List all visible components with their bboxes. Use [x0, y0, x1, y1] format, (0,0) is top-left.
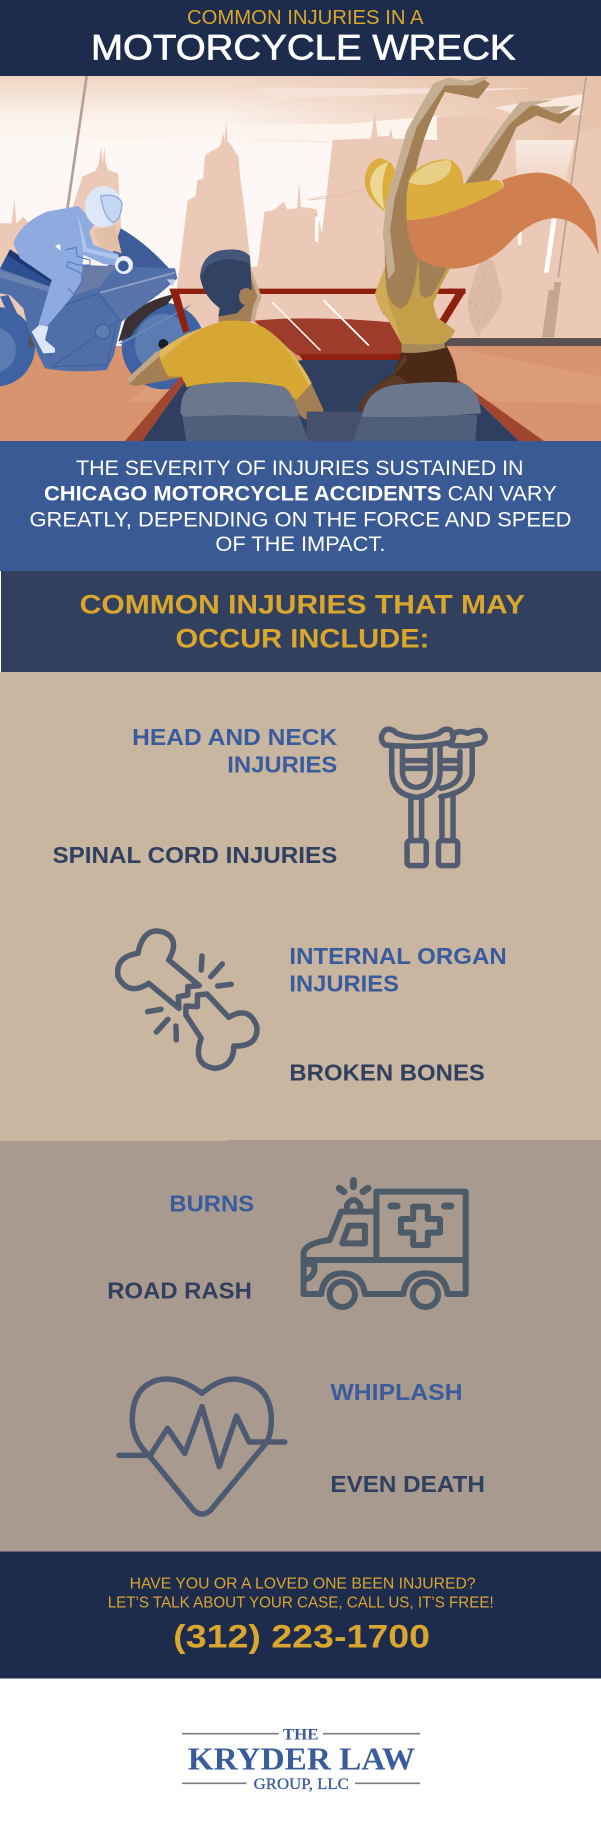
phone number: (312) 223-1700 [173, 1618, 430, 1654]
logo: The Kryder Law Group, LLC [182, 1726, 420, 1793]
label: internal organ injuries: INJURIES [289, 971, 399, 997]
panel: intro text [0, 441, 601, 571]
icon: crutches [381, 729, 485, 866]
label: road rash: ROAD RASH [107, 1278, 252, 1304]
label: whiplash: WHIPLASH [330, 1379, 463, 1405]
label: internal organ injuries: INTERNAL ORGAN [289, 943, 507, 969]
roadside tree [468, 77, 586, 338]
label: burns: BURNS [169, 1190, 254, 1216]
panel: intro text: CHICAGO MOTORCYCLE ACCIDENTS [44, 483, 442, 506]
panel: call to action: LET’S TALK ABOUT YOUR CASE, CALL US, IT’S FREE! [108, 1594, 494, 1611]
driver [127, 250, 324, 421]
title [91, 7, 516, 67]
label: even death: EVEN DEATH [330, 1471, 485, 1497]
icon: broken bone [118, 931, 257, 1068]
panel: hero illustration [0, 76, 601, 443]
panel: section heading [1, 571, 601, 672]
label: head and neck injuries: INJURIES [227, 752, 337, 778]
city skyline background [0, 76, 601, 443]
label: head and neck injuries: HEAD AND NECK [132, 724, 338, 750]
title: COMMON INJURIES IN A [187, 7, 424, 29]
panel: intro text: OF THE IMPACT. [215, 533, 385, 556]
panel: header [0, 0, 601, 76]
panel: beige injuries [0, 672, 601, 1141]
panel: intro text: GREATLY, DEPENDING ON THE FORCE AND SPEED [30, 508, 572, 531]
label: internal organ injuries [289, 943, 507, 997]
panel: section heading: OCCUR INCLUDE: [176, 623, 429, 653]
car seats [181, 382, 481, 441]
panel: intro text: CAN VARY [448, 483, 557, 506]
motorcycle and rider [0, 186, 205, 389]
panel: call to action [0, 1552, 601, 1678]
logo: The Kryder Law Group, LLC: GROUP, LLC [254, 1776, 349, 1793]
icon: ambulance [304, 1181, 466, 1307]
logo: The Kryder Law Group, LLC: THE [283, 1726, 318, 1743]
panel: call to action: HAVE YOU OR A LOVED ONE BEEN INJURED? [130, 1575, 476, 1592]
panel: taupe injuries [0, 1140, 601, 1552]
woman passenger [360, 77, 599, 417]
title: MOTORCYCLE WRECK [91, 28, 516, 67]
label: broken bones: BROKEN BONES [289, 1060, 485, 1086]
label: spinal cord injuries: SPINAL CORD INJURIES [52, 842, 337, 868]
logo: The Kryder Law Group, LLC: KRYDER LAW [188, 1740, 415, 1776]
label: head and neck injuries [132, 724, 338, 778]
panel: section heading: COMMON INJURIES THAT MAY [80, 589, 525, 619]
icon: heart with pulse line [119, 1379, 285, 1514]
panel: intro text: THE SEVERITY OF INJURIES SUSTAINED IN [76, 457, 524, 480]
car hood and windshield [125, 289, 544, 441]
